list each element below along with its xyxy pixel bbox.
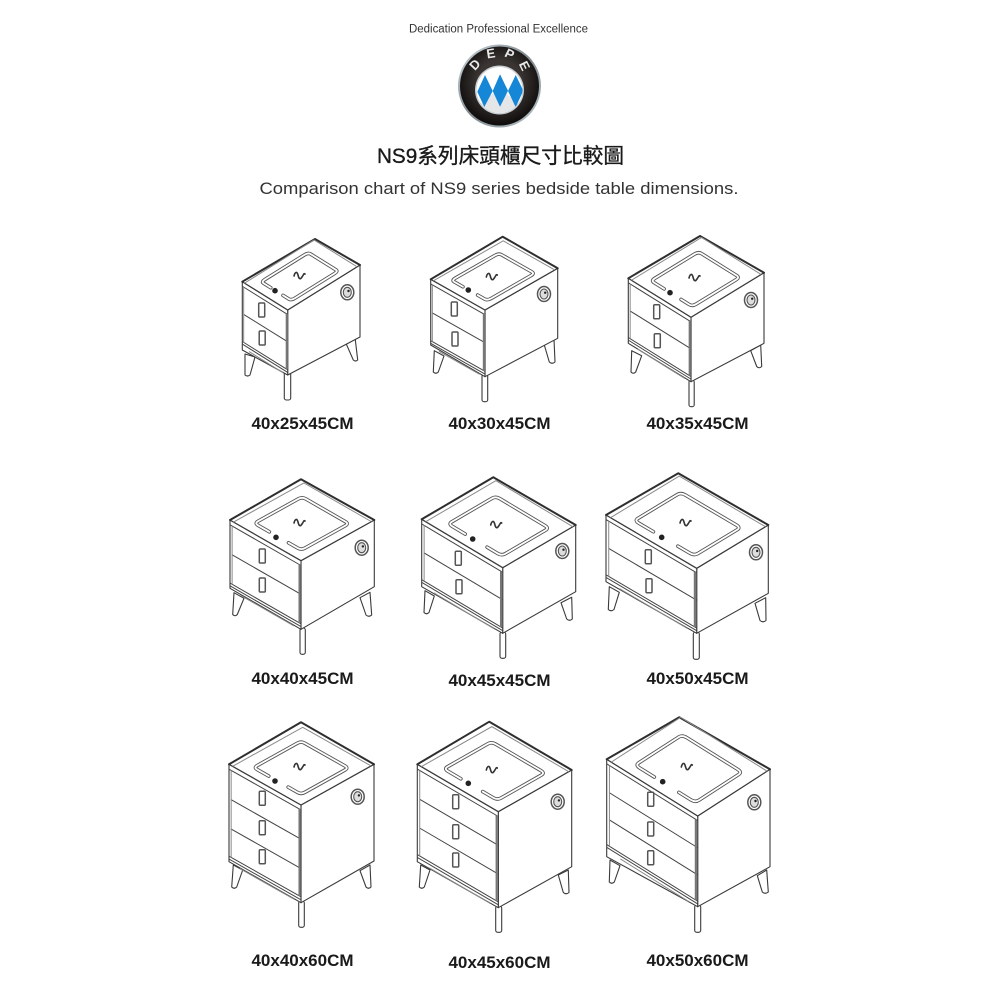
size label: 40x35x45CM [646, 414, 749, 433]
title: NS9系列床頭櫃尺寸比較圖 [377, 145, 624, 168]
panel: table 40x45x45 [422, 477, 576, 658]
tabletop [230, 479, 374, 561]
outlet [551, 794, 564, 809]
size label: 40x25x45CM [251, 414, 354, 433]
tagline: Dedication Professional Excellence [409, 24, 588, 36]
size label: 40x40x45CM [251, 669, 354, 688]
drawer front [431, 279, 485, 377]
drawer front [229, 764, 301, 903]
legs [233, 592, 372, 654]
drawer front [417, 764, 498, 908]
outlet [538, 286, 550, 302]
side panel [301, 520, 374, 629]
outlet [744, 292, 758, 308]
legs [608, 587, 766, 659]
subtitle: Comparison chart of NS9 series bedside table dimensions. [260, 179, 738, 198]
outlet [748, 795, 761, 810]
tabletop [242, 239, 360, 310]
panel: table 40x40x60 [229, 722, 374, 927]
logo: DEPE badge: DEPE [469, 48, 530, 72]
size label: 40x50x45CM [646, 669, 749, 688]
tabletop [607, 717, 770, 816]
panel: table 40x35x45 [628, 236, 764, 407]
legs [419, 865, 569, 932]
drawer front [422, 519, 503, 634]
panel: table 40x45x60 [417, 722, 572, 932]
tabletop [628, 236, 764, 317]
size label: 40x40x60CM [251, 951, 354, 970]
drawer front [607, 759, 698, 907]
logo: DEPE badge [458, 44, 541, 128]
side panel [498, 770, 572, 908]
side panel [698, 769, 770, 907]
side panel [485, 268, 558, 377]
tabletop [606, 473, 768, 568]
tabletop [417, 722, 572, 812]
panel: table 40x30x45 [431, 237, 558, 402]
drawer front [606, 515, 697, 634]
tabletop [229, 722, 374, 805]
panel: table 40x50x45 [606, 473, 768, 659]
legs [245, 337, 358, 400]
legs [609, 860, 768, 932]
panel: table 40x25x45 [242, 239, 360, 400]
legs [631, 345, 762, 407]
side panel [697, 525, 768, 633]
outlet [341, 285, 354, 300]
tabletop [431, 237, 558, 310]
panel: table 40x40x45 [230, 479, 374, 654]
legs [232, 865, 371, 927]
panel: table 40x50x60 [607, 717, 770, 932]
outlet [750, 545, 762, 560]
side panel [288, 265, 360, 375]
size label: 40x45x60CM [448, 953, 551, 972]
side panel [301, 764, 374, 903]
outlet [351, 789, 364, 804]
legs [433, 339, 555, 402]
legs [424, 591, 572, 658]
drawer front [628, 278, 691, 382]
size label: 40x45x45CM [448, 671, 551, 690]
outlet [355, 540, 368, 555]
drawer front [242, 282, 288, 376]
drawer front [230, 520, 301, 630]
side panel [691, 273, 764, 382]
side panel [503, 525, 576, 633]
size label: 40x50x60CM [646, 951, 749, 970]
size label: 40x30x45CM [448, 414, 551, 433]
tabletop [422, 477, 576, 568]
outlet [556, 544, 569, 558]
